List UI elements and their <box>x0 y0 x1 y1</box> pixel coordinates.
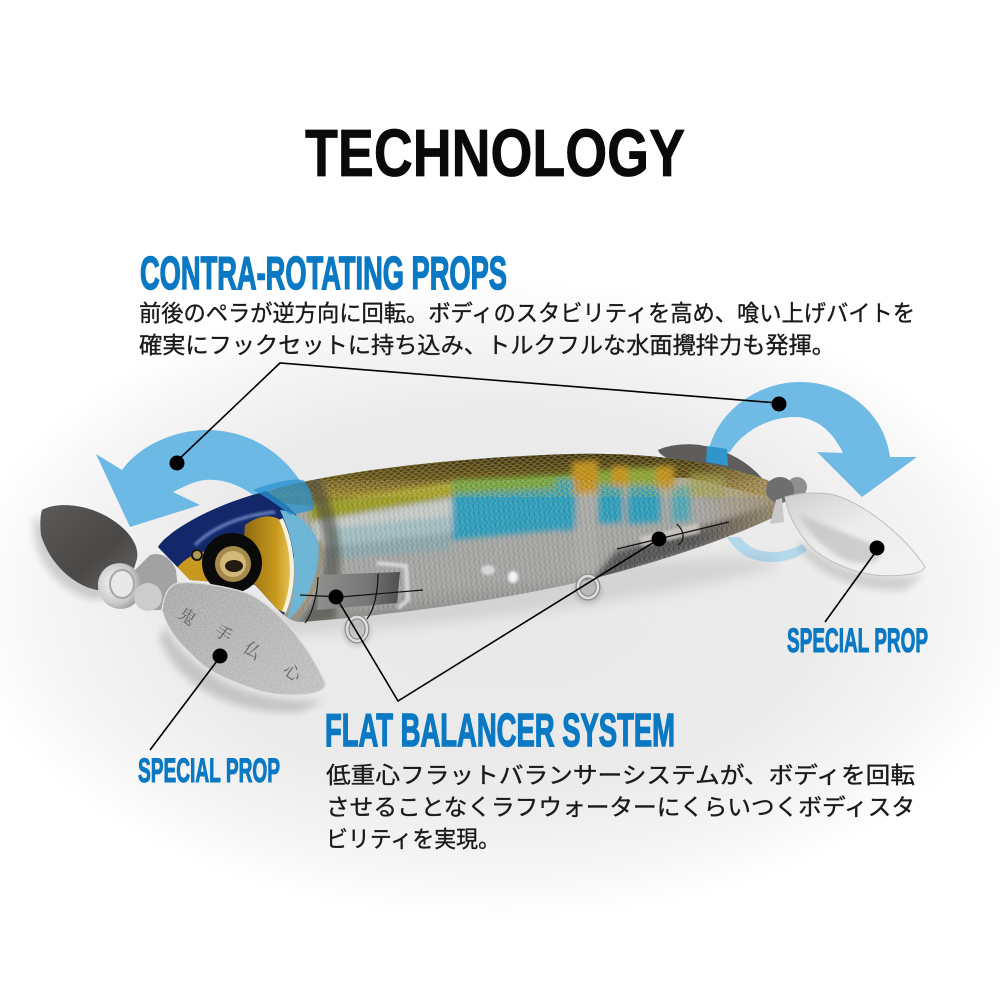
heading: flat balancer system: FLAT BALANCER SYSTEM <box>325 704 675 756</box>
shadow: lure <box>220 542 780 650</box>
description: contra-rotating props <box>139 300 915 358</box>
callout lines: flat balancer <box>328 532 666 701</box>
grey backdrop <box>0 280 1000 920</box>
heading: contra-rotating props: CONTRA-ROTATING PROPS <box>140 247 507 299</box>
shadow: left rear blade <box>34 515 120 600</box>
icon: left swivel <box>91 554 178 615</box>
head: gill white stripe <box>281 519 292 612</box>
icon: eye <box>192 533 262 593</box>
icon: left front blade with kanji: 心 <box>279 656 308 687</box>
description: flat balancer system: ビリティを実現。 <box>326 826 500 852</box>
icon: left front blade with kanji <box>162 583 325 695</box>
callout line: left special prop <box>150 648 228 750</box>
icon: left front blade with kanji: 鬼 <box>174 600 202 630</box>
description: contra-rotating props: 前後のペラが逆方向に回転。ボディのスタビリティを高め、喰い上げバイトを <box>139 300 915 326</box>
head: gill gold <box>244 516 290 612</box>
head: lower cheek <box>178 552 208 582</box>
icon: hook ring right <box>574 576 602 604</box>
arrow overlay on fin <box>706 446 728 466</box>
head: tan edge <box>296 540 321 618</box>
shadow: left front blade <box>160 625 325 712</box>
arrow: right rotation <box>707 382 917 497</box>
description: contra-rotating props: 確実にフックセットに持ち込み、トルクフルな水面攪拌力も発揮。 <box>139 332 835 358</box>
icon: lure body <box>155 445 800 625</box>
dark underside <box>593 504 774 577</box>
body colour bands <box>310 460 725 574</box>
icon: right swivel <box>766 477 807 524</box>
icon: left front blade with kanji: 手 <box>210 617 238 647</box>
top scale texture <box>251 454 770 497</box>
gill shadow <box>300 478 340 625</box>
head: dark blue <box>158 491 298 615</box>
description: flat balancer system: 低重心フラットバランサーシステムが、ボディを回転 <box>326 762 915 788</box>
arrow: right rotation lower ring <box>727 537 807 562</box>
head: gill teal <box>280 510 321 620</box>
icon: hook ring left <box>343 617 371 647</box>
panel: contra-rotating props <box>139 247 915 358</box>
arrow: left rotation <box>96 430 313 527</box>
flat balancer window <box>300 563 423 623</box>
icon: left front blade with kanji: 仏 <box>239 634 268 665</box>
arrow overlay on body <box>253 480 314 515</box>
title: TECHNOLOGY <box>305 116 685 191</box>
description: flat balancer system: させることなくラフウォーターにくらいつくボディスタ <box>326 794 915 820</box>
panel: flat balancer system <box>325 704 915 852</box>
shadow: right blade <box>800 540 925 590</box>
callout lines: contra-rotating props <box>170 363 786 470</box>
highlight: right blade <box>800 515 880 563</box>
label: left special prop: SPECIAL PROP <box>138 752 280 790</box>
icon: dorsal fin dark prop <box>658 444 765 482</box>
icon: left rear blade <box>40 505 137 590</box>
icon: right blade <box>785 493 925 576</box>
head: blue highlight <box>195 512 275 545</box>
body highlights <box>481 523 700 583</box>
rear balancer mark <box>617 522 729 549</box>
description: flat balancer system <box>326 762 915 852</box>
dark olive back <box>268 454 770 506</box>
callout line: right special prop <box>825 540 884 622</box>
